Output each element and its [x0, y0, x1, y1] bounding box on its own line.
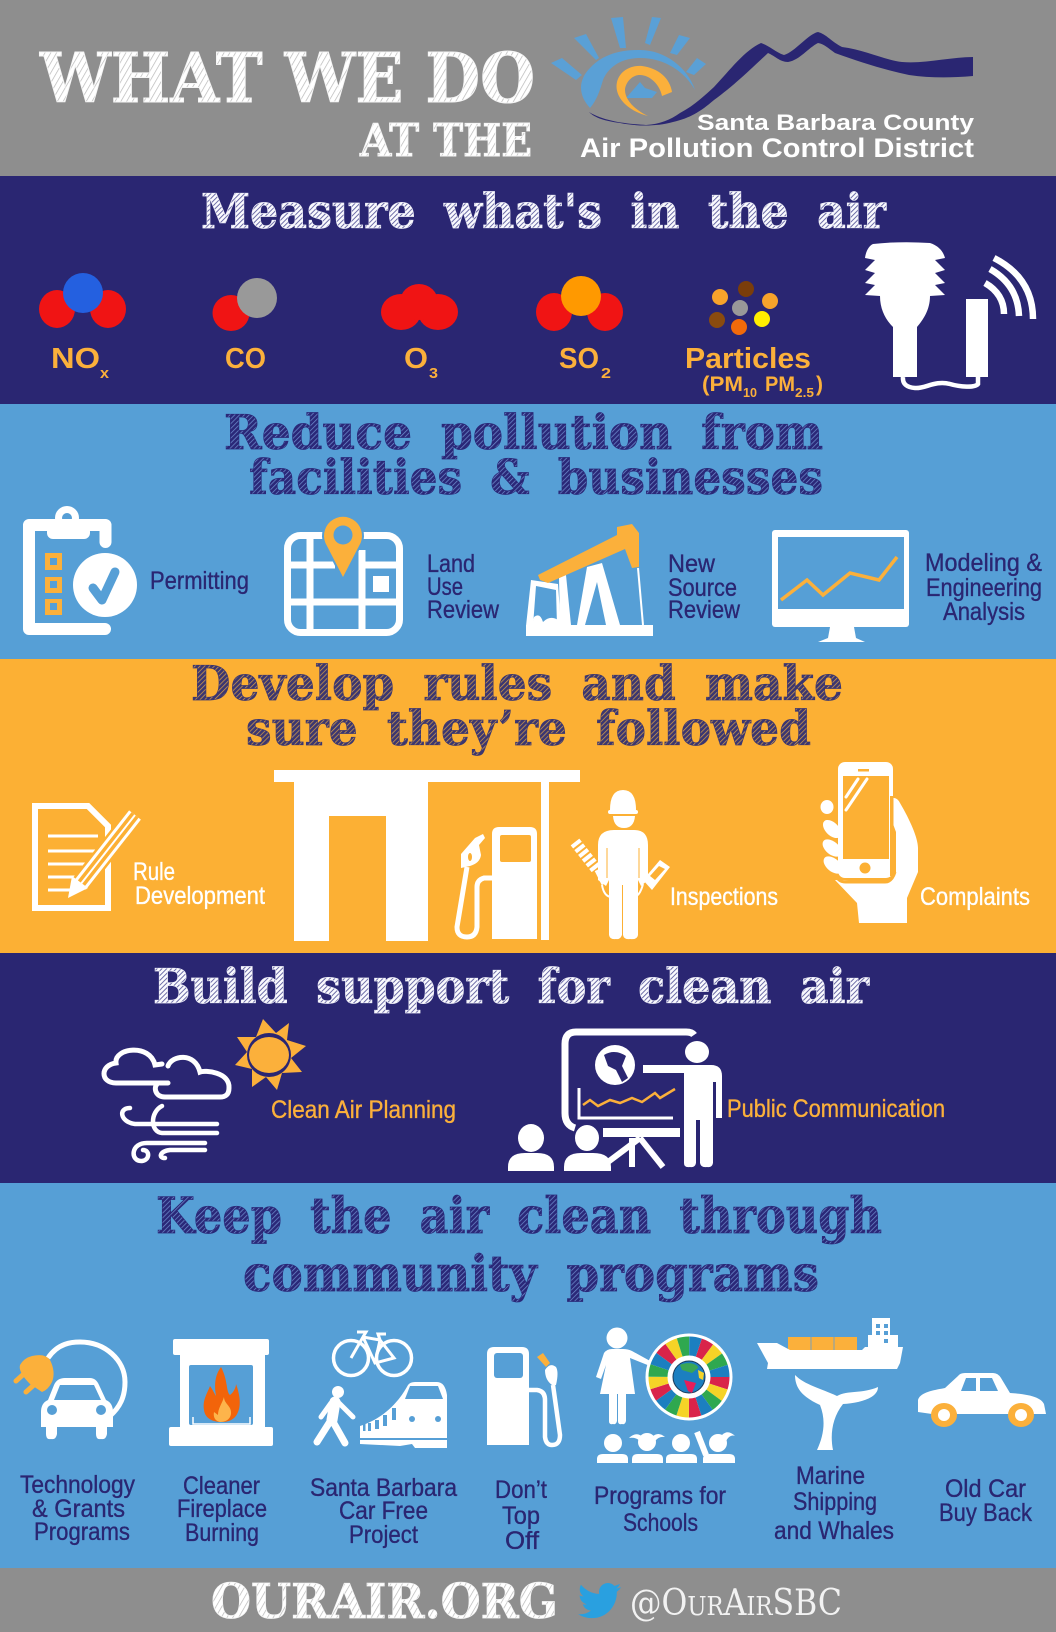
title: WHAT WE DO: [39, 39, 535, 119]
panel: header: [0, 0, 1056, 176]
icon: monitor with chart: [772, 530, 909, 642]
label: clean air planning: Clean Air Planning: [271, 1096, 456, 1124]
labels: programs: Burning: [185, 1519, 259, 1547]
panel: reduce: [0, 404, 1056, 659]
heading: reduce: [224, 405, 823, 506]
icon: wind: [122, 1106, 217, 1161]
heading: measure: Measure what's in the air: [201, 184, 887, 240]
labels: programs: Programs for: [594, 1482, 726, 1510]
label: rule development: [133, 858, 265, 910]
labels: programs: & Grants: [32, 1495, 125, 1523]
heading: reduce: Reduce pollution from: [224, 405, 823, 461]
icon: whale tail: [795, 1375, 878, 1450]
panel: footer: [0, 1568, 1056, 1632]
icon: presentation board and presenter: [565, 1032, 722, 1167]
labels: programs: Project: [349, 1521, 418, 1549]
panel: measure: [0, 176, 1056, 404]
label: land use review: Land: [427, 550, 475, 578]
labels: programs: Santa Barbara: [310, 1474, 457, 1502]
labels: programs: Don’t: [495, 1476, 547, 1504]
pollutant labels: O: [404, 343, 428, 375]
labels: programs: Technology: [20, 1471, 135, 1499]
pollutant labels: NO: [51, 343, 100, 375]
pollutant labels: Particles: [685, 343, 811, 375]
logo: sun and mountains: [551, 17, 973, 126]
pollutant labels: 2: [601, 365, 611, 382]
pollutant labels: PM: [765, 373, 795, 396]
label: modeling and engineering analysis: Analysis: [943, 598, 1025, 626]
icon: twitter bird: [578, 1583, 621, 1618]
label: permitting: Permitting: [150, 567, 249, 595]
labels: programs: Cleaner: [183, 1472, 260, 1500]
labels: programs: Marine: [796, 1462, 865, 1490]
labels: programs: [20, 1462, 1032, 1555]
labels: programs: Old Car: [945, 1475, 1026, 1503]
pollutant labels: (PM: [702, 373, 743, 396]
label: rule development: Development: [135, 882, 265, 910]
panel: rules: [0, 656, 1056, 953]
icon: O3 molecule: [381, 284, 458, 330]
labels: programs: Top: [502, 1502, 540, 1530]
panel: community programs: [0, 1183, 1056, 1568]
label: complaints: Complaints: [920, 883, 1030, 911]
panel: support: [0, 953, 1056, 1183]
icon: CO molecule: [212, 278, 277, 331]
labels: programs: Shipping: [793, 1488, 877, 1516]
heading: community programs: [156, 1186, 882, 1303]
icon: permitting clipboard: [29, 510, 137, 629]
pollutant labels: x: [100, 365, 110, 382]
pollutant labels: 10: [743, 385, 757, 400]
label: land use review: Use: [427, 573, 463, 601]
heading: reduce: facilities & businesses: [249, 450, 823, 506]
icon: audience: [508, 1124, 611, 1171]
labels: programs: and Whales: [774, 1517, 894, 1545]
labels: programs: Fireplace: [177, 1495, 267, 1523]
icon: bicycle: [334, 1332, 412, 1376]
pollutant labels: SO: [559, 343, 599, 375]
labels: programs: Schools: [623, 1509, 698, 1537]
title: [39, 39, 535, 167]
heading: rules: sure they’re followed: [246, 701, 811, 757]
label: rule development: Rule: [133, 858, 175, 886]
icon: fuel pump: [487, 1347, 560, 1445]
icon: clouds: [104, 1050, 229, 1097]
title: AT THE: [359, 114, 532, 167]
icon: air monitoring station: [865, 242, 1033, 388]
icon: inspector: [575, 790, 670, 939]
icon: cargo ship: [757, 1318, 903, 1369]
icon: sun: [235, 1019, 306, 1090]
heading: community programs: community programs: [243, 1244, 819, 1303]
icon: land use map: [288, 517, 400, 633]
labels: programs: Off: [505, 1527, 539, 1555]
icon: old car: [918, 1373, 1046, 1427]
pollutant labels: CO: [225, 343, 266, 375]
labels: programs: Buy Back: [939, 1499, 1032, 1527]
pollutant labels: 3: [429, 365, 438, 382]
pollutant labels: 2.5: [795, 385, 814, 400]
pollutant labels: ): [816, 373, 823, 396]
label: land use review: Review: [427, 596, 500, 624]
icon: rule document and pencil: [35, 806, 135, 908]
label: new source review: New: [668, 550, 716, 578]
icon: train: [360, 1382, 447, 1448]
heading: community programs: Keep the air clean through: [156, 1186, 882, 1245]
label: inspections: Inspections: [670, 883, 778, 911]
icon: teacher: [596, 1328, 652, 1424]
icon: fireplace: [169, 1339, 273, 1446]
labels: programs: Programs: [34, 1518, 130, 1546]
icon: students: [597, 1432, 735, 1463]
logo text: Air Pollution Control District: [580, 133, 974, 163]
heading: rules: [191, 656, 843, 757]
logo text: Santa Barbara County: [697, 110, 975, 135]
label: modeling and engineering analysis: Modeling &: [925, 549, 1042, 577]
label: new source review: Review: [668, 596, 741, 624]
label: new source review: Source: [668, 574, 737, 602]
icon: NOx molecule: [39, 273, 126, 328]
labels: programs: Car Free: [339, 1497, 428, 1525]
icon: oil pumpjack: [526, 524, 653, 636]
twitter handle: @OURAIRSBC: [630, 1583, 842, 1624]
icon: colour wheel with globe: [646, 1334, 732, 1420]
heading: rules: Develop rules and make: [191, 656, 843, 712]
logo text: [580, 110, 975, 163]
icon: pedestrian: [317, 1386, 353, 1443]
label: land use review: [427, 550, 500, 624]
label: new source review: [668, 550, 741, 624]
heading: support: Build support for clean air: [153, 959, 870, 1015]
icon: SO2 molecule: [536, 276, 623, 331]
label: modeling and engineering analysis: [925, 549, 1042, 626]
icon: hand holding phone: [819, 762, 918, 923]
icon: gas station: [274, 770, 580, 941]
website address: OURAIR.ORG: [211, 1574, 558, 1630]
icon: particles: [709, 281, 778, 335]
pollutant labels: [51, 343, 823, 400]
label: modeling and engineering analysis: Engineering: [926, 574, 1042, 602]
label: public communication: Public Communication: [727, 1095, 945, 1123]
icon: plug-in car: [16, 1342, 125, 1439]
